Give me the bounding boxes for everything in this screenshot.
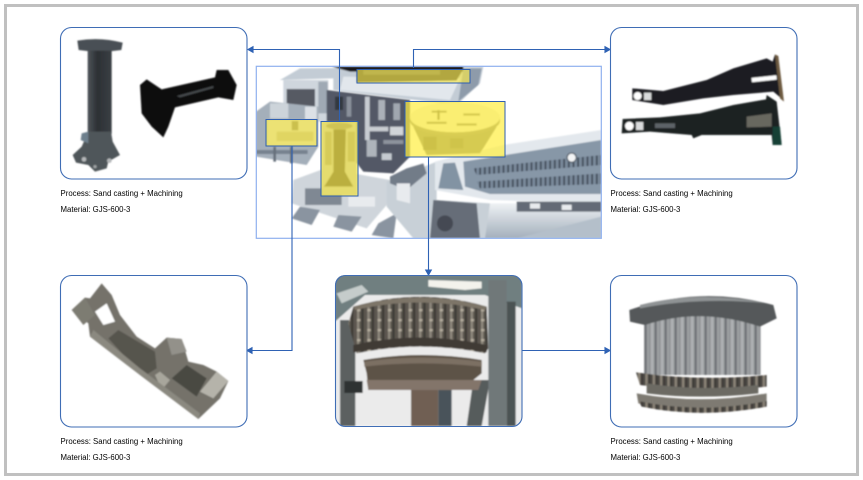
center lower section (387, 162, 498, 238)
top part (357, 69, 463, 83)
panel: bottom-center photo (335, 275, 522, 426)
photo: frame casting (72, 283, 228, 419)
panel: bottom-right (610, 276, 797, 462)
machine core (327, 90, 410, 173)
caption: Material: GJS-600-3 (610, 453, 680, 462)
machine upper housing (280, 67, 483, 122)
caption (610, 189, 733, 214)
photo: drum casting (629, 296, 777, 413)
highlight: left part (266, 120, 317, 146)
panel: central machine cutaway (256, 66, 601, 238)
left part (267, 120, 317, 145)
arrow: bottom-center photo to bottom-right panel (522, 348, 610, 353)
photo: column castings (73, 39, 237, 172)
caption: Material: GJS-600-3 (610, 205, 680, 214)
caption: Material: GJS-600-3 (60, 205, 130, 214)
panel: top-left (60, 28, 247, 214)
highlight: top part (357, 70, 470, 83)
caption: Process: Sand casting + Machining (610, 189, 733, 198)
left conveyor (256, 102, 318, 165)
panel: top-right (610, 28, 797, 214)
lower right area (485, 202, 601, 238)
caption (60, 437, 183, 462)
caption: Process: Sand casting + Machining (60, 437, 183, 446)
arrow: left part to bottom-left panel (247, 146, 292, 353)
caption: Material: GJS-600-3 (60, 453, 130, 462)
arrow: top part to top-right panel (414, 47, 610, 68)
right conveyor (435, 130, 601, 203)
lower base and feet (292, 168, 397, 238)
arrow: disc assembly to bottom-center photo (426, 157, 431, 275)
panel: bottom-left (60, 276, 247, 462)
arrow: column to top-left panel (248, 47, 340, 121)
caption: Process: Sand casting + Machining (60, 189, 183, 198)
highlight: disc assembly (405, 102, 505, 157)
frame: central panel border (256, 66, 601, 238)
caption: Process: Sand casting + Machining (610, 437, 733, 446)
disc assembly (410, 102, 500, 155)
caption (60, 189, 183, 214)
photo: arm castings (622, 54, 784, 145)
highlight: column (321, 122, 358, 196)
caption (610, 437, 733, 462)
column casting (322, 122, 357, 195)
